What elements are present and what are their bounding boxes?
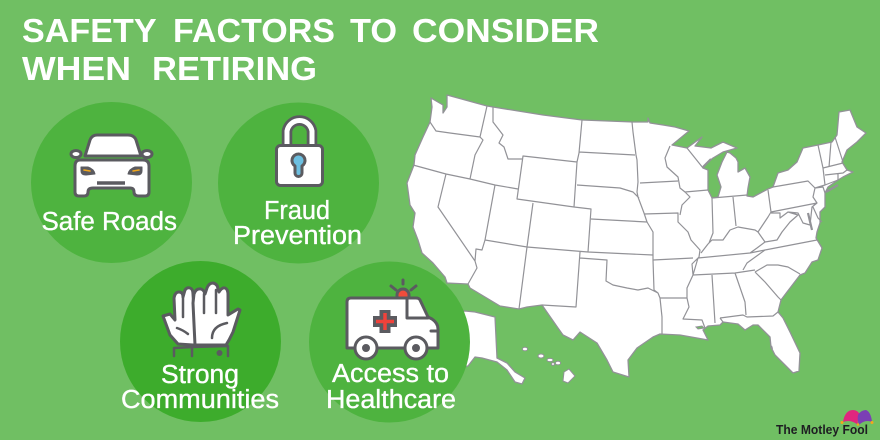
map: Hawaii	[522, 347, 575, 383]
label: Fraud Prevention	[233, 197, 362, 250]
map: United States	[407, 95, 866, 384]
label: Fraud Prevention: Fraud	[264, 197, 330, 225]
label: Strong Communities: Strong	[161, 361, 239, 389]
icon: raised hands	[163, 283, 240, 356]
logo: The Motley Fool	[776, 410, 874, 437]
circle: Fraud Prevention	[218, 102, 379, 264]
circle: Strong Communities	[120, 261, 281, 422]
label: Access to Healthcare	[326, 360, 456, 414]
title: FACTORS	[173, 12, 335, 49]
circle: Access to Healthcare	[309, 262, 470, 422]
label: Access to Healthcare: Healthcare	[326, 386, 456, 414]
label: Safe Roads: Safe Roads	[42, 208, 177, 236]
title: TO	[350, 12, 397, 49]
map: Alaska	[440, 311, 525, 384]
icon: ambulance	[347, 280, 438, 359]
label: Fraud Prevention: Prevention	[233, 222, 362, 250]
circle: Safe Roads	[31, 102, 192, 263]
icon: padlock	[276, 121, 322, 186]
label: Access to Healthcare: Access to	[332, 360, 449, 388]
icon: jester hat	[840, 410, 874, 426]
logo: The Motley Fool: The Motley Fool	[776, 422, 868, 437]
title: CONSIDER	[412, 12, 599, 49]
icon: car	[71, 135, 152, 196]
title: SAFETY	[22, 12, 157, 49]
title: WHEN	[22, 50, 131, 87]
title: RETIRING	[152, 50, 317, 87]
label: Strong Communities	[121, 361, 279, 414]
title	[22, 12, 599, 87]
label: Strong Communities: Communities	[121, 386, 279, 414]
